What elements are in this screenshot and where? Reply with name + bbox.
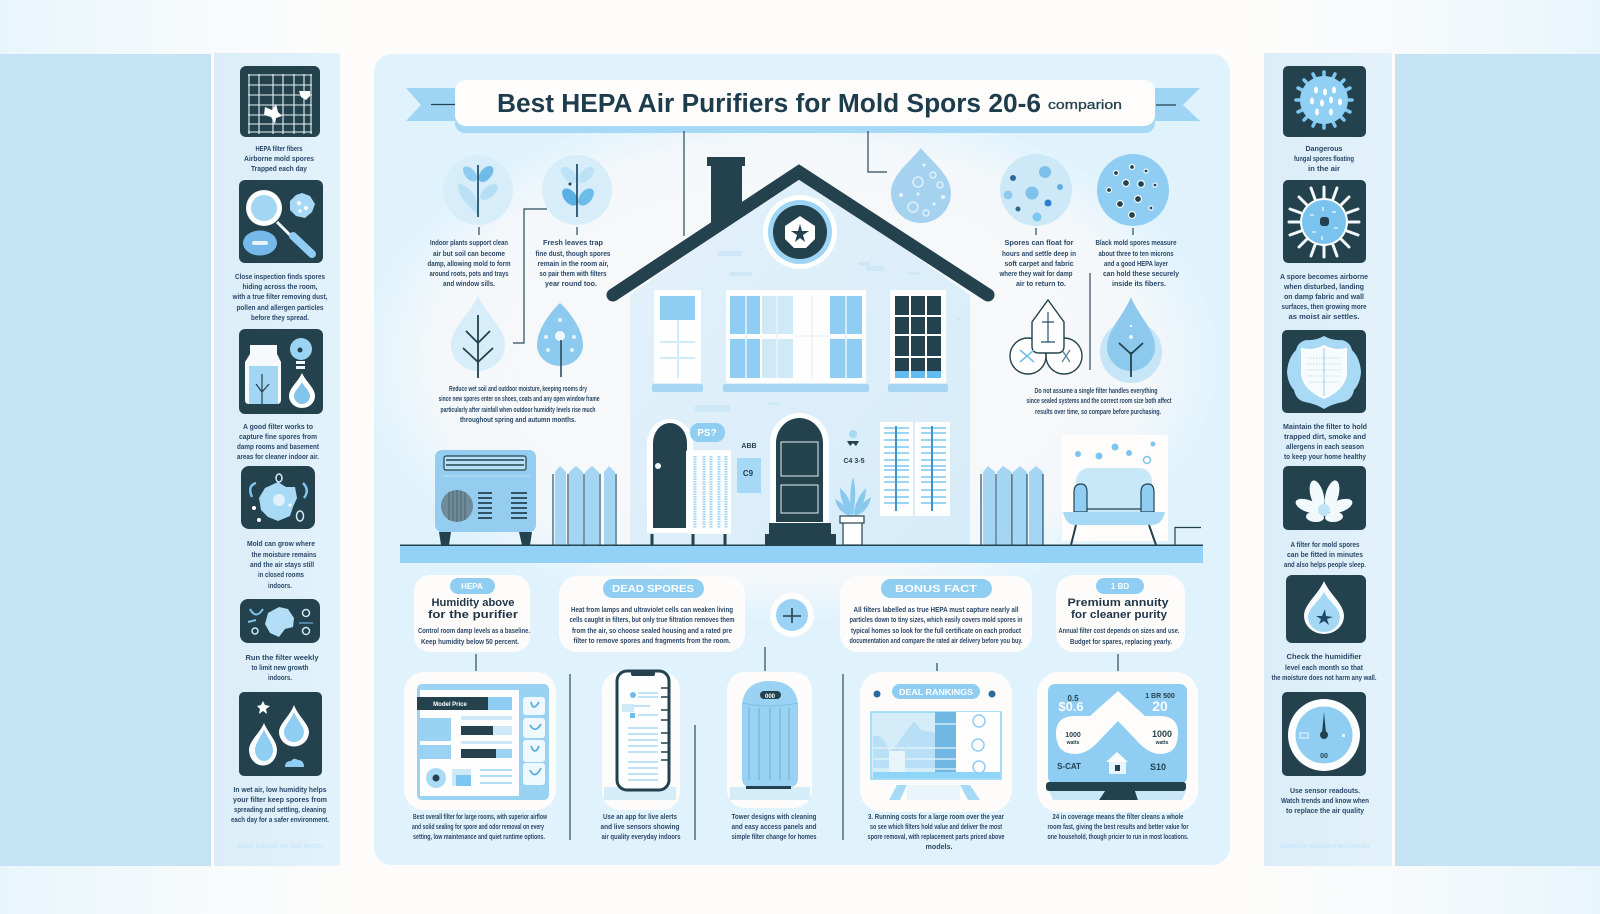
sign pill: PS? [697,428,717,439]
panel: main [374,54,1230,865]
text: left item 4: and the air stays still [250,560,314,569]
window: centre [723,290,869,392]
door: left with panel [647,419,731,545]
card: house monitor: watts [1066,740,1080,746]
text: left item 6: spreading and settling, cleaning [234,805,326,814]
icon: water drops [239,692,322,776]
icon: armchair [1062,435,1168,545]
text: leaf block 1 [428,238,511,288]
text: left item 4 [247,539,316,590]
panel: right icon column [1264,53,1392,866]
caption: dashboard [412,812,547,841]
text: leaf block 1: damp, allowing mold to form [428,259,511,268]
card: premium: Premium annuity [1068,597,1169,609]
title banner [406,80,1200,133]
icon: bottle and drop [239,329,323,414]
caption: chart monitor: so see which filters hold value and deliver the most [870,822,1002,831]
card: premium: 1 BD [1111,582,1129,591]
window: right [888,290,948,392]
caption: dashboard: and solid sealing for spore and odor removal on every [412,822,545,831]
card: bonus fact: documentation and compare the rated air delivery before you buy. [850,636,1022,645]
card: premium: Annual filter cost depends on sizes and use. [1058,626,1180,635]
card: humidity: HEPA [461,582,483,591]
text: left item 5: to limit new growth [252,663,309,672]
text: right item 6: to replace the air quality [1286,806,1365,815]
text: leaf block 2: fine dust, though spores [536,249,610,258]
emblem [763,195,837,269]
icon: spores circle light [1000,154,1072,226]
sign card [737,443,761,493]
icon: filter grid [240,66,320,137]
text: right item 6: Watch trends and know when [1281,796,1369,805]
caption: house monitor: room fast, giving the best results and better value for [1048,822,1189,831]
card: phone [602,671,680,810]
icon: plant [835,477,871,545]
text: right item 1: in the air [1308,164,1340,173]
text: left item 2: with a true filter removing dust, [232,292,328,301]
small bracket [1175,528,1201,545]
text: left item 4: Mold can grow where [247,539,315,548]
text: spore block 1: where they wait for damp [999,269,1073,278]
text: right item 5: Check the humidifier [1286,652,1362,661]
caption: chart monitor: 3. Running costs for a large room over the year [868,812,1004,821]
text: left item 3: A good filter works to [243,422,313,431]
text: tree block: particularly after rainfall when outdoor humidity levels rise much [440,405,596,414]
text: left item 3: capture fine spores from [239,432,317,441]
icon: tree drop right [1100,297,1162,383]
icon: lamp and label [843,430,865,465]
card: bonus fact: particles down to tiny sizes, which easily covers mold spores in [850,615,1023,624]
card: house monitor [1037,672,1198,812]
card: premium [1056,575,1185,652]
text: right item 6 [1281,786,1369,815]
icon: gauge: 00 [1320,753,1328,760]
icon: pale spore drop [891,148,951,223]
card: humidity: Humidity above [432,597,514,609]
icon: water drop with star [1286,575,1366,643]
chimney [707,157,745,224]
text: right item 4: and also helps people sleep. [1284,560,1366,569]
card: dead spores: filter to remove spores and fragments from the room. [574,636,730,645]
text: spore block 2: inside its fibers. [1112,279,1166,288]
house wall [630,175,970,545]
text: tree block: Reduce wet soil and outdoor moisture, keeping rooms dry [449,384,588,393]
card: house monitor: 20 [1152,698,1168,714]
text: right lower block: results over time, so compare before purchasing. [1035,407,1161,416]
icon: air conditioner [435,450,536,545]
roof [613,172,988,295]
text: right item 3: trapped dirt, smoke and [1284,432,1366,441]
caption: phone: and live sensors showing [600,822,680,831]
text: right item 2 [1280,272,1368,321]
text: leaf block 2: year round too. [545,279,597,288]
icon: leaf circle 2 [542,155,612,225]
text: spore block 1: Spores can float for [1004,238,1074,247]
text: left item 6: In wet air, low humidity helps [234,785,326,794]
text: spore block 2 [1096,238,1180,288]
card: house monitor: S-CAT [1057,762,1081,771]
text: left item 1: Airborne mold spores [244,154,314,163]
text: right item 3: allergens in each season [1286,442,1364,451]
card: house monitor: watts [1155,740,1169,746]
text: spore block 2: and a good HEPA layer [1104,259,1168,268]
text: left item 2: Close inspection finds spores [235,272,325,281]
card: bonus fact: typical homes so look for the full certificate on each product [851,626,1021,635]
text: tree block: since new spores enter on shoes, coats and any open window frame [438,394,600,403]
card: house monitor: 1000 [1065,732,1081,739]
caption: chart monitor [868,812,1004,851]
card: bonus fact: All filters labelled as true HEPA must capture nearly all [854,605,1018,614]
card: dead spores: cells caught in filters, but only true filtration removes them [570,615,735,624]
footnote: left column: Data based on lab tests. [237,841,323,850]
icon: shield badge [1282,330,1366,413]
caption: dashboard: Best overall filter for large rooms, with superior airflow [413,812,547,821]
text: left item 6 [231,785,329,824]
house [613,157,988,545]
text: tree block: throughout spring and autumn months. [460,415,576,424]
title text: Best HEPA Air Purifiers for Mold Spors 20-6 [497,90,1041,118]
card: dead spores: from the air, so choose sealed housing and a rated pre [572,626,732,635]
text: left item 1: HEPA filter fibers [256,144,302,153]
panel: left side blue block [0,54,211,866]
icon: spore drop [537,303,583,377]
icon: plus button [770,593,814,637]
text: left item 6: your filter keep spores from [233,795,327,804]
card: purifier [727,672,812,808]
icon: spore cluster [241,466,315,529]
card: house monitor: 1 BR 500 [1145,693,1175,700]
ribbon right [1150,88,1200,121]
text: left item 4: indoors. [268,581,292,590]
card: bonus fact: BONUS FACT [895,584,977,595]
icon: three leaf shield [1010,300,1082,374]
text: left item 2: hiding across the room, [242,282,318,291]
panel: right side blue block [1395,54,1600,866]
card: humidity: Control room damp levels as a baseline. [418,626,530,635]
icon: lamp and label: C4 3-5 [843,458,865,465]
text: left item 2: before they spread. [251,313,309,322]
text: right item 4: can be fitted in minutes [1287,550,1363,559]
door: main [765,413,836,545]
shutters [880,422,950,516]
text: right item 2: A spore becomes airborne [1280,272,1368,281]
caption: purifier: simple filter change for homes [732,832,816,841]
text: right item 2: surfaces, then growing more [1282,302,1366,311]
sign card: ABB [741,443,757,450]
caption: chart monitor: spore removal, with replacement parts priced above [868,832,1004,841]
icon: radiator left [553,466,616,545]
text: right item 3: to keep your home healthy [1284,452,1367,461]
text: right item 2: on damp fabric and wall [1284,292,1364,301]
text: left item 2 [232,272,328,322]
caption: phone: air quality everyday indoors [602,832,680,841]
caption: purifier: Tower designs with cleaning [732,812,817,821]
connector lines [476,131,1133,840]
text: right item 3 [1283,422,1367,461]
text: left item 5: Run the filter weekly [246,653,319,662]
text: leaf block 2: remain in the room air, [538,259,608,268]
text: right lower block [1026,386,1172,416]
text: leaf block 1: air but soil can become [433,249,505,258]
text: right item 5 [1272,652,1376,682]
text: right item 6: Use sensor readouts. [1290,786,1360,795]
text: leaf block 1: Indoor plants support clean [430,238,508,247]
icon: leaf circle 1 [443,155,513,225]
text: right item 4 [1284,540,1366,569]
icon: tree drop [451,296,505,378]
card: house monitor: S10 [1150,762,1166,772]
caption: phone: Use an app for live alerts [603,812,677,821]
card: dead spores [559,576,745,652]
caption: house monitor: 24 in coverage means the filter cleans a whole [1052,812,1184,821]
caption: purifier: and easy access panels and [732,822,817,831]
text: left item 5: indoors. [268,673,292,682]
floor [400,544,1203,563]
sign pill [690,423,725,442]
text: right item 4: A filter for mold spores [1290,540,1360,549]
text: leaf block 1: around roots, pots and trays [430,269,508,278]
text: left item 3: areas for cleaner indoor air. [237,452,319,461]
caption: house monitor: one household, though pricier to run in most locations. [1048,832,1188,841]
card: house monitor: 0.5 [1067,694,1079,703]
text: tree block [438,384,600,424]
text: left item 1: Trapped each day [251,164,308,173]
icon: white flower [1283,466,1366,530]
text: left item 4: the moisture remains [252,550,316,559]
card: humidity: for the purifier [428,609,519,621]
card: dead spores: Heat from lamps and ultraviolet cells can weaken living [571,605,733,614]
text: left item 6: each day for a safer environment. [231,815,329,824]
caption: phone [600,812,680,841]
text: spore block 1: hours and settle deep in [1002,249,1076,258]
card: humidity [414,575,530,652]
card: dead spores: DEAD SPORES [612,584,694,595]
text: spore block 2: can hold these securely [1103,269,1180,278]
title banner: comparion [1048,97,1122,112]
ribbon left [406,88,460,121]
text: spore block 1: air to return to. [1016,279,1066,288]
text: left item 1 [244,144,314,173]
text: right item 2: as moist air settles. [1288,312,1360,321]
card: house monitor: $0.6 [1058,699,1084,714]
card: humidity: Keep humidity below 50 percent. [421,637,519,646]
text: right lower block: Do not assume a single filter handles everything [1034,386,1158,395]
text: right item 5: the moisture does not harm any wall. [1272,673,1376,682]
text: right item 1: fungal spores floating [1294,154,1354,163]
text: left item 4: in closed rooms [258,570,304,579]
card: dashboard mockup [404,672,556,810]
text: left item 5 [246,653,319,682]
text: right item 1 [1294,144,1354,173]
text: leaf block 2: so pair them with filters [540,269,606,278]
icon: spore virus [1283,66,1366,137]
card: premium: for cleaner purity [1071,609,1168,621]
text: right item 1: Dangerous [1306,144,1342,153]
text: spore block 2: about three to ten microns [1098,249,1174,258]
text: right item 3: Maintain the filter to hold [1283,422,1367,431]
footnote: right column: Based on published test results [1280,841,1370,850]
text: leaf block 1: and window sills. [443,279,495,288]
caption: house monitor [1048,812,1189,841]
text: left item 3 [237,422,319,461]
card: house monitor: 1000 [1152,729,1172,739]
icon: spores circle dark [1097,154,1169,226]
text: left item 3: damp rooms and basement [237,442,319,451]
text: leaf block 2 [536,238,610,288]
sign card: C9 [743,469,754,478]
card: dashboard mockup: Model Price [433,702,467,708]
caption: dashboard: setting, low maintenance and quiet runtime options. [413,832,545,841]
window: left [652,290,703,392]
text: spore block 2: Black mold spores measure [1096,238,1176,247]
icon: spore and moisture [240,599,320,643]
text: spore block 1: soft carpet and fabric [1004,259,1074,268]
icon: gauge [1282,692,1366,776]
text: right item 5: level each month so that [1285,663,1363,672]
text: right lower block: since sealed systems and the correct room size both affect [1026,396,1172,405]
text: left item 2: pollen and allergen particles [236,303,324,312]
card: chart monitor [860,672,1012,812]
panel: left icon column [214,53,340,866]
wall bricks [695,251,961,412]
icon: radiator right [981,466,1043,545]
card: bonus fact [840,576,1032,652]
icon: magnifier [239,180,323,263]
text: right item 2: when disturbed, landing [1283,282,1364,291]
card: purifier: 000 [765,694,776,700]
caption: purifier [732,812,817,841]
icon: spiked spore [1283,180,1366,263]
text: leaf block 2: Fresh leaves trap [543,238,603,247]
card: premium: Budget for spares, replacing yearly. [1070,637,1172,646]
caption: chart monitor: models. [926,842,952,851]
text: spore block 1 [999,238,1076,288]
card: chart monitor: DEAL RANKINGS [899,688,974,697]
